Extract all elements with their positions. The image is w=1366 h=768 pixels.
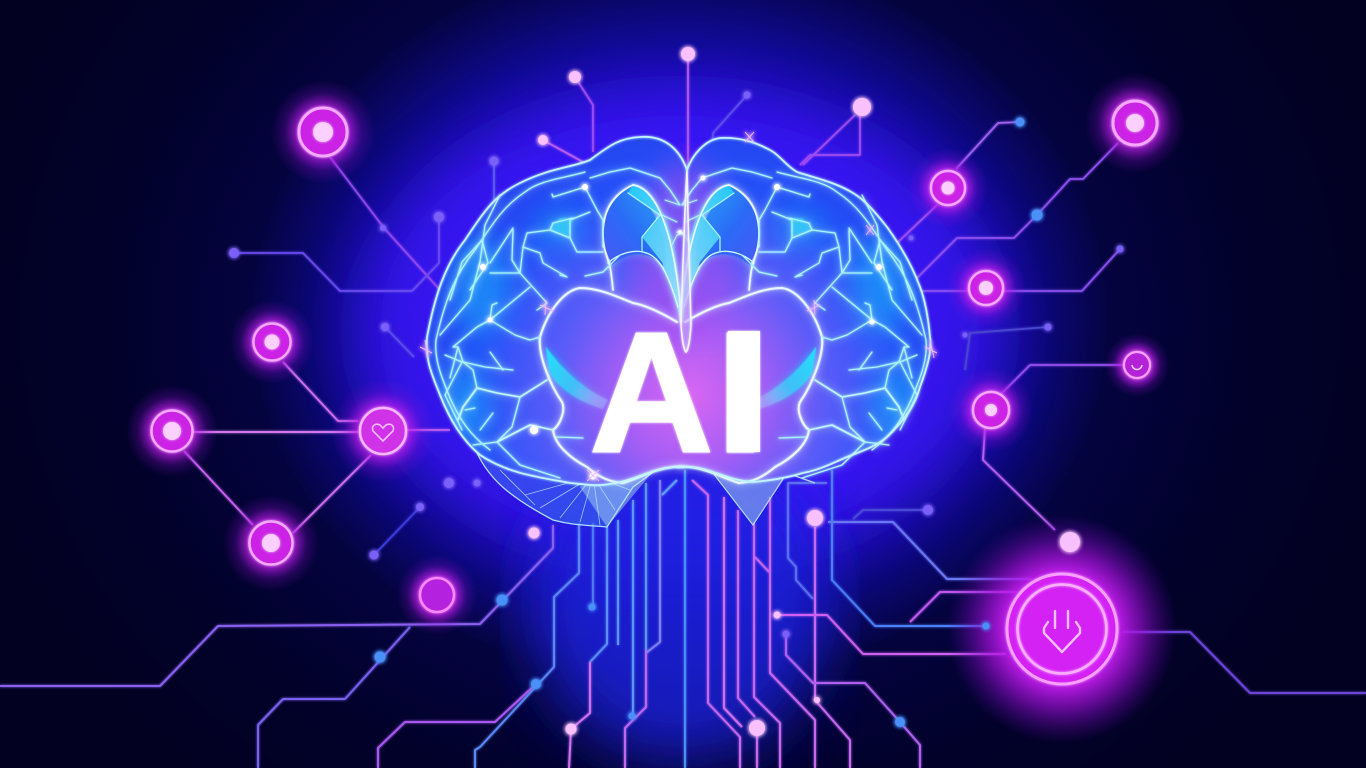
veins left hemisphere <box>436 168 685 483</box>
node ring mid-left <box>230 300 314 384</box>
veins right hemisphere <box>677 168 926 483</box>
glowing dots <box>229 47 1124 736</box>
node ring bottom-left <box>223 495 319 591</box>
node ring far-left <box>126 385 218 477</box>
AI label: AI <box>590 298 764 488</box>
circuit traces: left <box>184 157 494 555</box>
nodes: right cluster <box>908 73 1185 452</box>
circuit traces: top <box>543 54 860 170</box>
nodes: left cluster <box>126 80 477 635</box>
node ring upper-right <box>908 148 988 228</box>
purple-blue dots <box>229 92 1124 638</box>
node ring mid-right <box>946 248 1026 328</box>
centre seam <box>681 170 691 352</box>
cerebellum <box>477 453 815 527</box>
node ring top-right <box>1085 73 1185 173</box>
brain cyan glow patches <box>441 214 919 445</box>
blue dots <box>374 118 1042 727</box>
brain aura <box>360 95 1000 760</box>
pink dots <box>528 47 1080 736</box>
circuit traces: right <box>897 122 1124 530</box>
node ring smile <box>1105 333 1169 397</box>
brain body <box>427 137 931 485</box>
node ring top-left <box>271 80 375 184</box>
node heart <box>331 379 435 483</box>
sparkles <box>420 132 937 481</box>
node ring lower-right <box>949 368 1033 452</box>
circuit traces: bottom left <box>0 470 780 768</box>
brain outline <box>427 137 931 485</box>
purple centre <box>635 160 735 340</box>
circuit traces: bottom right <box>755 470 1366 768</box>
power button icon <box>947 514 1177 744</box>
brain <box>420 132 937 488</box>
node ring lower <box>397 555 477 635</box>
